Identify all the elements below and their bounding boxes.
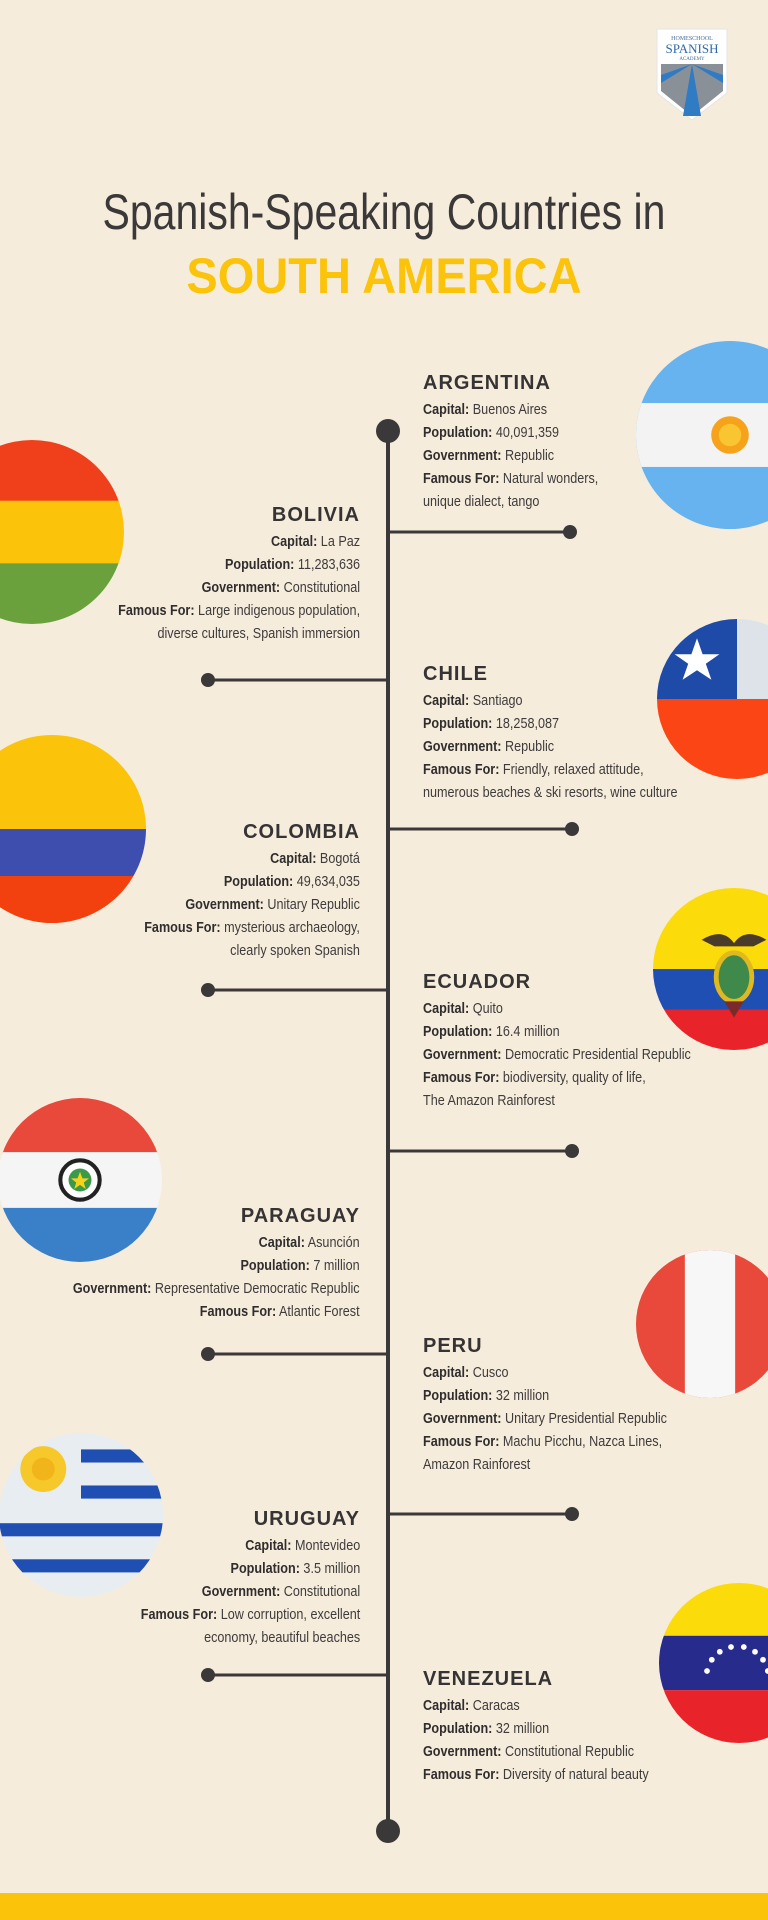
text: bolivia: diverse cultures, Spanish immersion [157, 626, 360, 642]
text: colombia: Government: Unitary Republic [185, 897, 360, 913]
text: paraguay: Capital: Asunción [259, 1235, 360, 1251]
text: paraguay: PARAGUAY [241, 1205, 360, 1227]
text: bolivia [118, 504, 360, 642]
text: bolivia: Famous For: Large indigenous population, [118, 603, 360, 619]
text: argentina: Famous For: Natural wonders, [423, 471, 598, 487]
text: peru: Famous For: Machu Picchu, Nazca Lines, [423, 1434, 662, 1450]
text: bolivia: Government: Constitutional [202, 580, 360, 596]
text: venezuela: Population: 32 million [423, 1721, 549, 1737]
flag: venezuela [659, 1583, 768, 1743]
text: chile: Capital: Santiago [423, 693, 523, 709]
title: Spanish-Speaking Countries in [103, 184, 665, 240]
text: ecuador: ECUADOR [423, 971, 531, 993]
text: peru: Government: Unitary Presidential Republic [423, 1411, 667, 1427]
text: uruguay: Government: Constitutional [202, 1584, 360, 1600]
text: paraguay [73, 1205, 360, 1320]
text: chile: numerous beaches & ski resorts, wine culture [423, 785, 678, 801]
text: ecuador [423, 971, 691, 1109]
text: paraguay: Government: Representative Democratic Republic [73, 1281, 360, 1297]
text: uruguay: Capital: Montevideo [245, 1538, 360, 1554]
footer bar [0, 1893, 768, 1920]
flag: bolivia [0, 440, 124, 624]
text: chile: CHILE [423, 663, 488, 685]
text: argentina: Government: Republic [423, 448, 554, 464]
text: argentina: ARGENTINA [423, 372, 551, 394]
text: chile: Government: Republic [423, 739, 554, 755]
text: colombia: COLOMBIA [243, 821, 360, 843]
flag: ecuador [653, 888, 768, 1050]
flag: uruguay [0, 1433, 163, 1597]
text: ecuador: Government: Democratic Presidential Republic [423, 1047, 691, 1063]
text: ecuador: Capital: Quito [423, 1001, 503, 1017]
text: uruguay [141, 1508, 360, 1646]
text: ecuador: Population: 16.4 million [423, 1024, 560, 1040]
text: peru [423, 1335, 667, 1473]
text: ecuador: Famous For: biodiversity, quality of life, [423, 1070, 646, 1086]
flag: argentina [636, 341, 768, 529]
text: uruguay: economy, beautiful beaches [204, 1630, 360, 1646]
text: venezuela: Famous For: Diversity of natural beauty [423, 1767, 649, 1783]
text: peru: PERU [423, 1335, 483, 1357]
text: venezuela: Government: Constitutional Republic [423, 1744, 634, 1760]
flag: colombia [0, 735, 146, 923]
text: ecuador: The Amazon Rainforest [423, 1093, 555, 1109]
text: venezuela: VENEZUELA [423, 1668, 553, 1690]
text: paraguay: Famous For: Atlantic Forest [200, 1304, 360, 1320]
text: peru: Population: 32 million [423, 1388, 549, 1404]
text: bolivia: Population: 11,283,636 [225, 557, 360, 573]
logo: ACADEMY [679, 57, 705, 62]
text: argentina [423, 372, 598, 510]
text: bolivia: BOLIVIA [272, 504, 360, 526]
text: colombia: Capital: Bogotá [270, 851, 360, 867]
text: peru: Capital: Cusco [423, 1365, 509, 1381]
subtitle: SOUTH AMERICA [186, 248, 582, 304]
text: uruguay: Famous For: Low corruption, excellent [141, 1607, 360, 1623]
flag: paraguay [0, 1098, 162, 1262]
text: paraguay: Population: 7 million [241, 1258, 360, 1274]
text: argentina: unique dialect, tango [423, 494, 539, 510]
flag: chile [657, 619, 768, 779]
text: colombia: Famous For: mysterious archaeology, [144, 920, 360, 936]
logo: HOMESCHOOL [671, 36, 713, 42]
text: uruguay: URUGUAY [254, 1508, 360, 1530]
text: colombia: Population: 49,634,035 [224, 874, 360, 890]
text: colombia: clearly spoken Spanish [230, 943, 360, 959]
text: peru: Amazon Rainforest [423, 1457, 530, 1473]
text: argentina: Capital: Buenos Aires [423, 402, 547, 418]
logo [656, 28, 728, 120]
text: venezuela [423, 1668, 649, 1783]
text: chile: Population: 18,258,087 [423, 716, 559, 732]
text: chile [423, 663, 678, 801]
logo: SPANISH [666, 41, 718, 56]
text: uruguay: Population: 3.5 million [230, 1561, 360, 1577]
text: bolivia: Capital: La Paz [271, 534, 360, 550]
text: colombia [144, 821, 360, 959]
text: argentina: Population: 40,091,359 [423, 425, 559, 441]
text: venezuela: Capital: Caracas [423, 1698, 520, 1714]
flag: peru [636, 1250, 768, 1398]
text: chile: Famous For: Friendly, relaxed attitude, [423, 762, 644, 778]
